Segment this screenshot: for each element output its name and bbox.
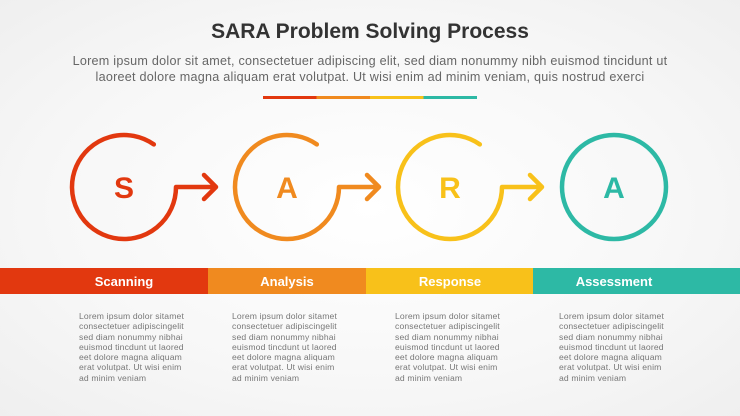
icon: A circle arrow: [235, 135, 379, 239]
circles diagram: [70, 132, 668, 242]
text: Response: sed diam nonummy nibhai: [395, 332, 499, 342]
icon: R circle arrow: R: [439, 172, 461, 205]
text: Assessment: consectetuer adipiscingelit: [559, 321, 664, 331]
text: Response: consectetuer adipiscingelit: [395, 321, 500, 331]
text: Scanning: ad minim veniam: [79, 373, 146, 383]
icon: S circle arrow: S: [114, 172, 134, 205]
text: Scanning: euismod tincdunt ut laored: [79, 342, 184, 352]
icon: A circle arrow: A: [276, 172, 298, 205]
text: Scanning: consectetuer adipiscingelit: [79, 321, 184, 331]
text: Analysis: erat volutpat. Ut wisi enim: [232, 362, 334, 372]
text: Assessment: euismod tincdunt ut laored: [559, 342, 664, 352]
text: Response: ad minim veniam: [395, 373, 462, 383]
text: Assessment: eet dolore magna aliquam: [559, 352, 662, 362]
text: Assessment: [559, 311, 664, 383]
text: Analysis: euismod tincdunt ut laored: [232, 342, 337, 352]
text: Assessment: sed diam nonummy nibhai: [559, 332, 663, 342]
text: Assessment: erat volutpat. Ut wisi enim: [559, 362, 661, 372]
text: Assessment: Lorem ipsum dolor sitamet: [559, 311, 664, 321]
text: Analysis: [232, 311, 337, 383]
text: Response: eet dolore magna aliquam: [395, 352, 498, 362]
text: Scanning: erat volutpat. Ut wisi enim: [79, 362, 181, 372]
color divider: [263, 96, 477, 99]
icon: R circle arrow: [398, 135, 542, 239]
label: Analysis: Analysis: [260, 274, 314, 289]
icon: A circle: [562, 135, 666, 239]
text: Scanning: sed diam nonummy nibhai: [79, 332, 183, 342]
text: Response: Lorem ipsum dolor sitamet: [395, 311, 500, 321]
label: Scanning: Scanning: [95, 274, 153, 289]
text: Scanning: eet dolore magna aliquam: [79, 352, 182, 362]
text: Analysis: sed diam nonummy nibhai: [232, 332, 336, 342]
text: Analysis: Lorem ipsum dolor sitamet: [232, 311, 337, 321]
text: Response: [395, 311, 500, 383]
title: SARA Problem Solving Process: [211, 20, 529, 43]
subtitle: [73, 54, 668, 84]
label: Response: Response: [419, 274, 481, 289]
text: Assessment: ad minim veniam: [559, 373, 626, 383]
bar: [0, 268, 740, 294]
icon: A circle: A: [603, 172, 625, 205]
text: Response: euismod tincdunt ut laored: [395, 342, 500, 352]
text: Scanning: Lorem ipsum dolor sitamet: [79, 311, 184, 321]
text: Scanning: [79, 311, 184, 383]
text: Analysis: ad minim veniam: [232, 373, 299, 383]
label: Assessment: Assessment: [576, 274, 652, 289]
text: Response: erat volutpat. Ut wisi enim: [395, 362, 497, 372]
subtitle: laoreet dolore magna aliquam erat volutpat. Ut wisi enim ad minim veniam, quis nostrud exerci: [96, 70, 644, 84]
text: Analysis: consectetuer adipiscingelit: [232, 321, 337, 331]
text: Analysis: eet dolore magna aliquam: [232, 352, 335, 362]
subtitle: Lorem ipsum dolor sit amet, consectetuer adipiscing elit, sed diam nonummy nibh euismod tincidunt ut: [73, 54, 667, 68]
icon: S circle arrow: [72, 135, 216, 239]
